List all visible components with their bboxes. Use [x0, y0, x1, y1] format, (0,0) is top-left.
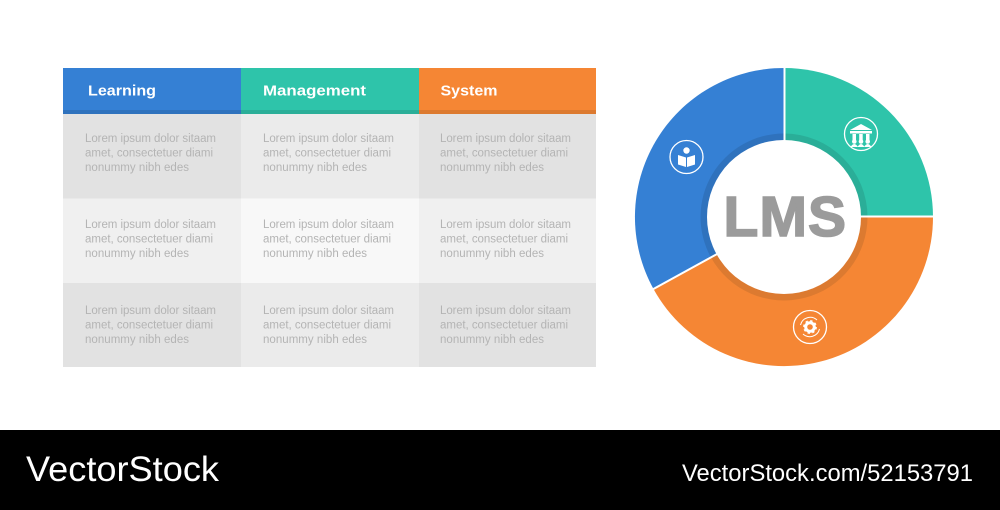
- footer URL text: VectorStock.com/52153791: [682, 460, 973, 487]
- row 3, column 2: Lorem ipsum dolor sitaam: [263, 305, 394, 317]
- row 1, column 1: Lorem ipsum dolor sitaam: [85, 133, 216, 145]
- row 2, column 1: [63, 198, 241, 283]
- row 1, column 2: nonummy nibh edes: [263, 162, 367, 174]
- row 2, column 2: Lorem ipsum dolor sitaam: [263, 219, 394, 231]
- row 3, column 3: Lorem ipsum dolor sitaam: [440, 305, 571, 317]
- segment: teal: [784, 68, 933, 217]
- row 2, column 3: Lorem ipsum dolor sitaam: [440, 219, 571, 231]
- row 1, column 1: amet, consectetuer diami: [85, 148, 213, 160]
- header: System: [419, 68, 596, 114]
- icon: gear with cycle arrows: [794, 310, 826, 344]
- header: System: System: [440, 82, 498, 100]
- row 3, column 2: nonummy nibh edes: [263, 334, 367, 346]
- row 1, column 3: Lorem ipsum dolor sitaam: [440, 133, 571, 145]
- center label: LMS: [724, 185, 846, 249]
- row 2, column 2: amet, consectetuer diami: [263, 234, 391, 246]
- row 2, column 3: nonummy nibh edes: [440, 248, 544, 260]
- row 2, column 2: nonummy nibh edes: [263, 248, 367, 260]
- row 3, column 1: [63, 283, 241, 367]
- header: Management: Management: [263, 82, 366, 100]
- row 1, column 3: nonummy nibh edes: [440, 162, 544, 174]
- row 1, column 3: [419, 114, 596, 198]
- segment divider: top: [784, 67, 786, 142]
- icon: reader with book: [670, 140, 703, 174]
- row 3, column 1: amet, consectetuer diami: [85, 320, 213, 332]
- segment divider: right: [859, 216, 934, 218]
- header: Learning: [63, 68, 241, 114]
- icon: institution building: [844, 118, 878, 150]
- row 3, column 1: Lorem ipsum dolor sitaam: [85, 305, 216, 317]
- row 1, column 1: nonummy nibh edes: [85, 162, 189, 174]
- footer bar: [0, 430, 1000, 510]
- row 3, column 2: amet, consectetuer diami: [263, 320, 391, 332]
- row 1, column 2: Lorem ipsum dolor sitaam: [263, 133, 394, 145]
- row 1, column 3: amet, consectetuer diami: [440, 148, 568, 160]
- row 1, column 1: [63, 114, 241, 198]
- row 2, column 3: amet, consectetuer diami: [440, 234, 568, 246]
- inner shadow ring: blue: [701, 134, 784, 258]
- row 3, column 2: [241, 283, 419, 367]
- table: [63, 68, 596, 367]
- row 2, column 1: nonummy nibh edes: [85, 248, 189, 260]
- row 2, column 1: Lorem ipsum dolor sitaam: [85, 219, 216, 231]
- row 3, column 3: [419, 283, 596, 367]
- segment divider: lower left: [652, 254, 718, 290]
- donut chart: [635, 67, 934, 366]
- header: Learning: Learning: [88, 82, 156, 100]
- row 2, column 3: [419, 198, 596, 283]
- segment: orange: [654, 217, 933, 366]
- inner shadow ring: teal: [784, 134, 868, 217]
- row 3, column 3: amet, consectetuer diami: [440, 320, 568, 332]
- row 1, column 2: amet, consectetuer diami: [263, 148, 391, 160]
- center circle: [707, 140, 861, 294]
- segment: blue: [635, 68, 784, 289]
- row 3, column 3: nonummy nibh edes: [440, 334, 544, 346]
- footer logo text: VectorStock: [26, 450, 220, 489]
- row 2, column 1: amet, consectetuer diami: [85, 234, 213, 246]
- row 3, column 1: nonummy nibh edes: [85, 334, 189, 346]
- header: Management: [241, 68, 419, 114]
- inner shadow ring: orange: [711, 217, 868, 300]
- row 2, column 2: [241, 198, 419, 283]
- row 1, column 2: [241, 114, 419, 198]
